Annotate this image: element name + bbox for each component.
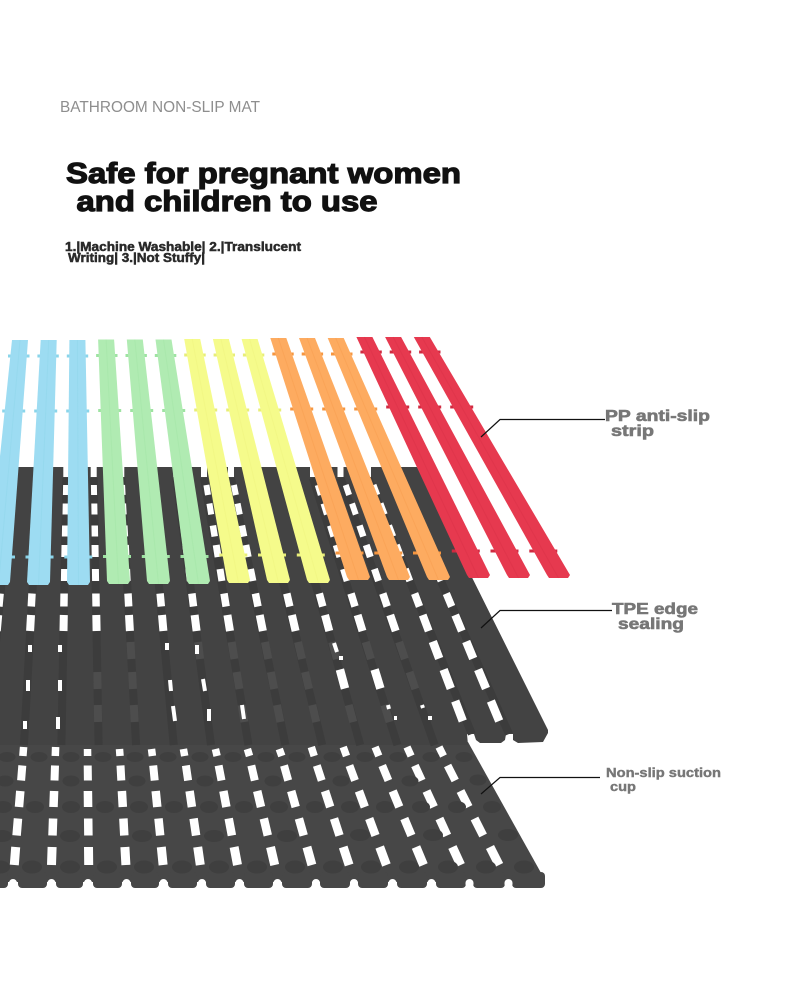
suction cups (0, 752, 534, 874)
leader line: PP anti-slip strip (481, 420, 605, 437)
leader line: non-slip suction cup (481, 778, 600, 794)
slots of middle layer (0, 485, 499, 729)
bottom mat layer with suction cups (0, 742, 545, 888)
slots of bottom layer (14, 747, 499, 865)
yellow strips (184, 339, 330, 583)
leader line: TPE edge sealing (481, 610, 612, 628)
top notches (39, 465, 395, 477)
title: Safe for pregnant women (66, 158, 461, 190)
orange strips (270, 338, 450, 580)
label: PP anti-slip strip: PP anti-slip (605, 408, 710, 425)
label: non-slip suction cup: Non-slip suction (606, 766, 721, 780)
title (66, 158, 461, 218)
label: non-slip suction cup (606, 766, 721, 794)
label: PP anti-slip strip: strip (611, 423, 654, 440)
label: TPE edge sealing: sealing (618, 616, 684, 633)
feature list (65, 240, 302, 265)
label: TPE edge sealing: TPE edge (612, 601, 698, 618)
label: PP anti-slip strip (605, 408, 710, 440)
slat ends of bottom layer (0, 872, 545, 888)
feature list: 1.|Machine Washable| 2.|Translucent (65, 240, 302, 254)
middle mat layer with TPE edge (0, 465, 548, 745)
label: TPE edge sealing (612, 601, 698, 633)
title: and children to use (76, 186, 378, 218)
eyebrow heading: BATHROOM NON-SLIP MAT (60, 99, 260, 116)
green strips (96, 340, 210, 584)
darker channels between slats (0, 478, 509, 745)
coloured PP anti-slip strips (0, 337, 570, 585)
red strips (356, 337, 570, 578)
blue strips (0, 340, 92, 585)
see-through blocks (97, 642, 415, 722)
feature list: Writing| 3.|Not Stuffy| (68, 251, 205, 265)
label: non-slip suction cup: cup (610, 780, 636, 794)
